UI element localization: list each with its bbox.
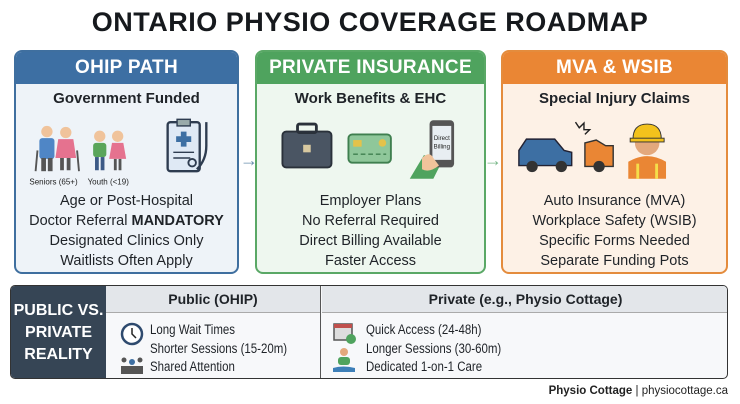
text: private insurance details: Employer Plans xyxy=(320,193,421,209)
text: OHIP details xyxy=(29,193,224,269)
text: private insurance details: Faster Access xyxy=(325,253,416,269)
text: public details: Shared Attention xyxy=(150,359,235,374)
header: private: Private (e.g., Physio Cottage) xyxy=(429,291,622,307)
icons: clock and group xyxy=(120,322,144,374)
text: public details: Long Wait Times xyxy=(150,322,235,337)
text: OHIP details: Doctor Referral MANDATORY xyxy=(29,213,224,229)
text: MVA details xyxy=(532,193,697,269)
header: private insurance: PRIVATE INSURANCE xyxy=(269,57,472,78)
header: OHIP path: OHIP PATH xyxy=(75,57,178,78)
text: MVA details: Workplace Safety (WSIB) xyxy=(532,213,697,229)
icons: seniors, youth, clipboard: Seniors (65+) xyxy=(29,177,78,186)
icons: calendar and care xyxy=(333,323,356,372)
panel: OHIP path xyxy=(14,50,239,274)
header: public xyxy=(106,286,320,313)
text: MVA details: Specific Forms Needed xyxy=(539,233,690,249)
footer: brand: Physio Cottage | physiocottage.ca xyxy=(549,385,728,397)
icons: car crash, worker xyxy=(518,122,666,179)
panel: private insurance xyxy=(255,50,486,274)
comparison table: public vs private xyxy=(10,285,728,379)
subheading: special injury claims: Special Injury Claims xyxy=(539,90,690,107)
column: public OHIP xyxy=(106,286,321,380)
icons: briefcase, card, phone: Direct xyxy=(434,135,450,142)
header: MVA & WSIB xyxy=(503,52,726,84)
header: OHIP path xyxy=(16,52,237,84)
text: private insurance details xyxy=(299,193,442,269)
text: OHIP details: Age or Post-Hospital xyxy=(60,193,193,209)
icons: briefcase, card, phone xyxy=(282,120,454,179)
icons: briefcase, card, phone: Billing xyxy=(434,144,451,151)
label cell: public vs private reality: PRIVATE xyxy=(25,324,92,341)
text: private insurance details: Direct Billing Available xyxy=(299,233,442,249)
arrow: private to MVA: → xyxy=(484,150,502,170)
label cell: public vs private reality: REALITY xyxy=(24,346,93,363)
title: ONTARIO PHYSIO COVERAGE ROADMAP xyxy=(92,7,648,37)
arrow: OHIP to private: → xyxy=(240,150,258,170)
text: MVA details: Auto Insurance (MVA) xyxy=(544,193,685,209)
text: private details xyxy=(366,322,501,374)
label cell: public vs private reality xyxy=(11,286,106,380)
header: private insurance xyxy=(257,52,484,84)
icons: seniors, youth, clipboard xyxy=(29,118,208,186)
text: public details: Shorter Sessions (15-20m) xyxy=(150,340,287,356)
subheading: work benefits: Work Benefits & EHC xyxy=(295,90,446,107)
text: private details: Quick Access (24-48h) xyxy=(366,322,481,337)
text: MVA details: Separate Funding Pots xyxy=(540,253,689,269)
subheading: government funded: Government Funded xyxy=(53,90,200,107)
text: OHIP details: Designated Clinics Only xyxy=(50,233,203,249)
header: private xyxy=(322,286,729,313)
header: MVA & WSIB: MVA & WSIB xyxy=(556,57,673,78)
text: public details xyxy=(150,322,287,374)
header: public: Public (OHIP) xyxy=(168,291,258,307)
icons: seniors, youth, clipboard: Youth (<19) xyxy=(88,177,129,186)
text: private insurance details: No Referral Required xyxy=(302,213,439,229)
column: private xyxy=(322,286,727,374)
text: private details: Longer Sessions (30-60m) xyxy=(366,340,501,356)
panel: MVA & WSIB xyxy=(501,50,728,274)
text: OHIP details: Waitlists Often Apply xyxy=(60,253,193,269)
text: private details: Dedicated 1-on-1 Care xyxy=(366,359,482,374)
label cell: public vs private reality: PUBLIC VS. xyxy=(14,302,103,319)
